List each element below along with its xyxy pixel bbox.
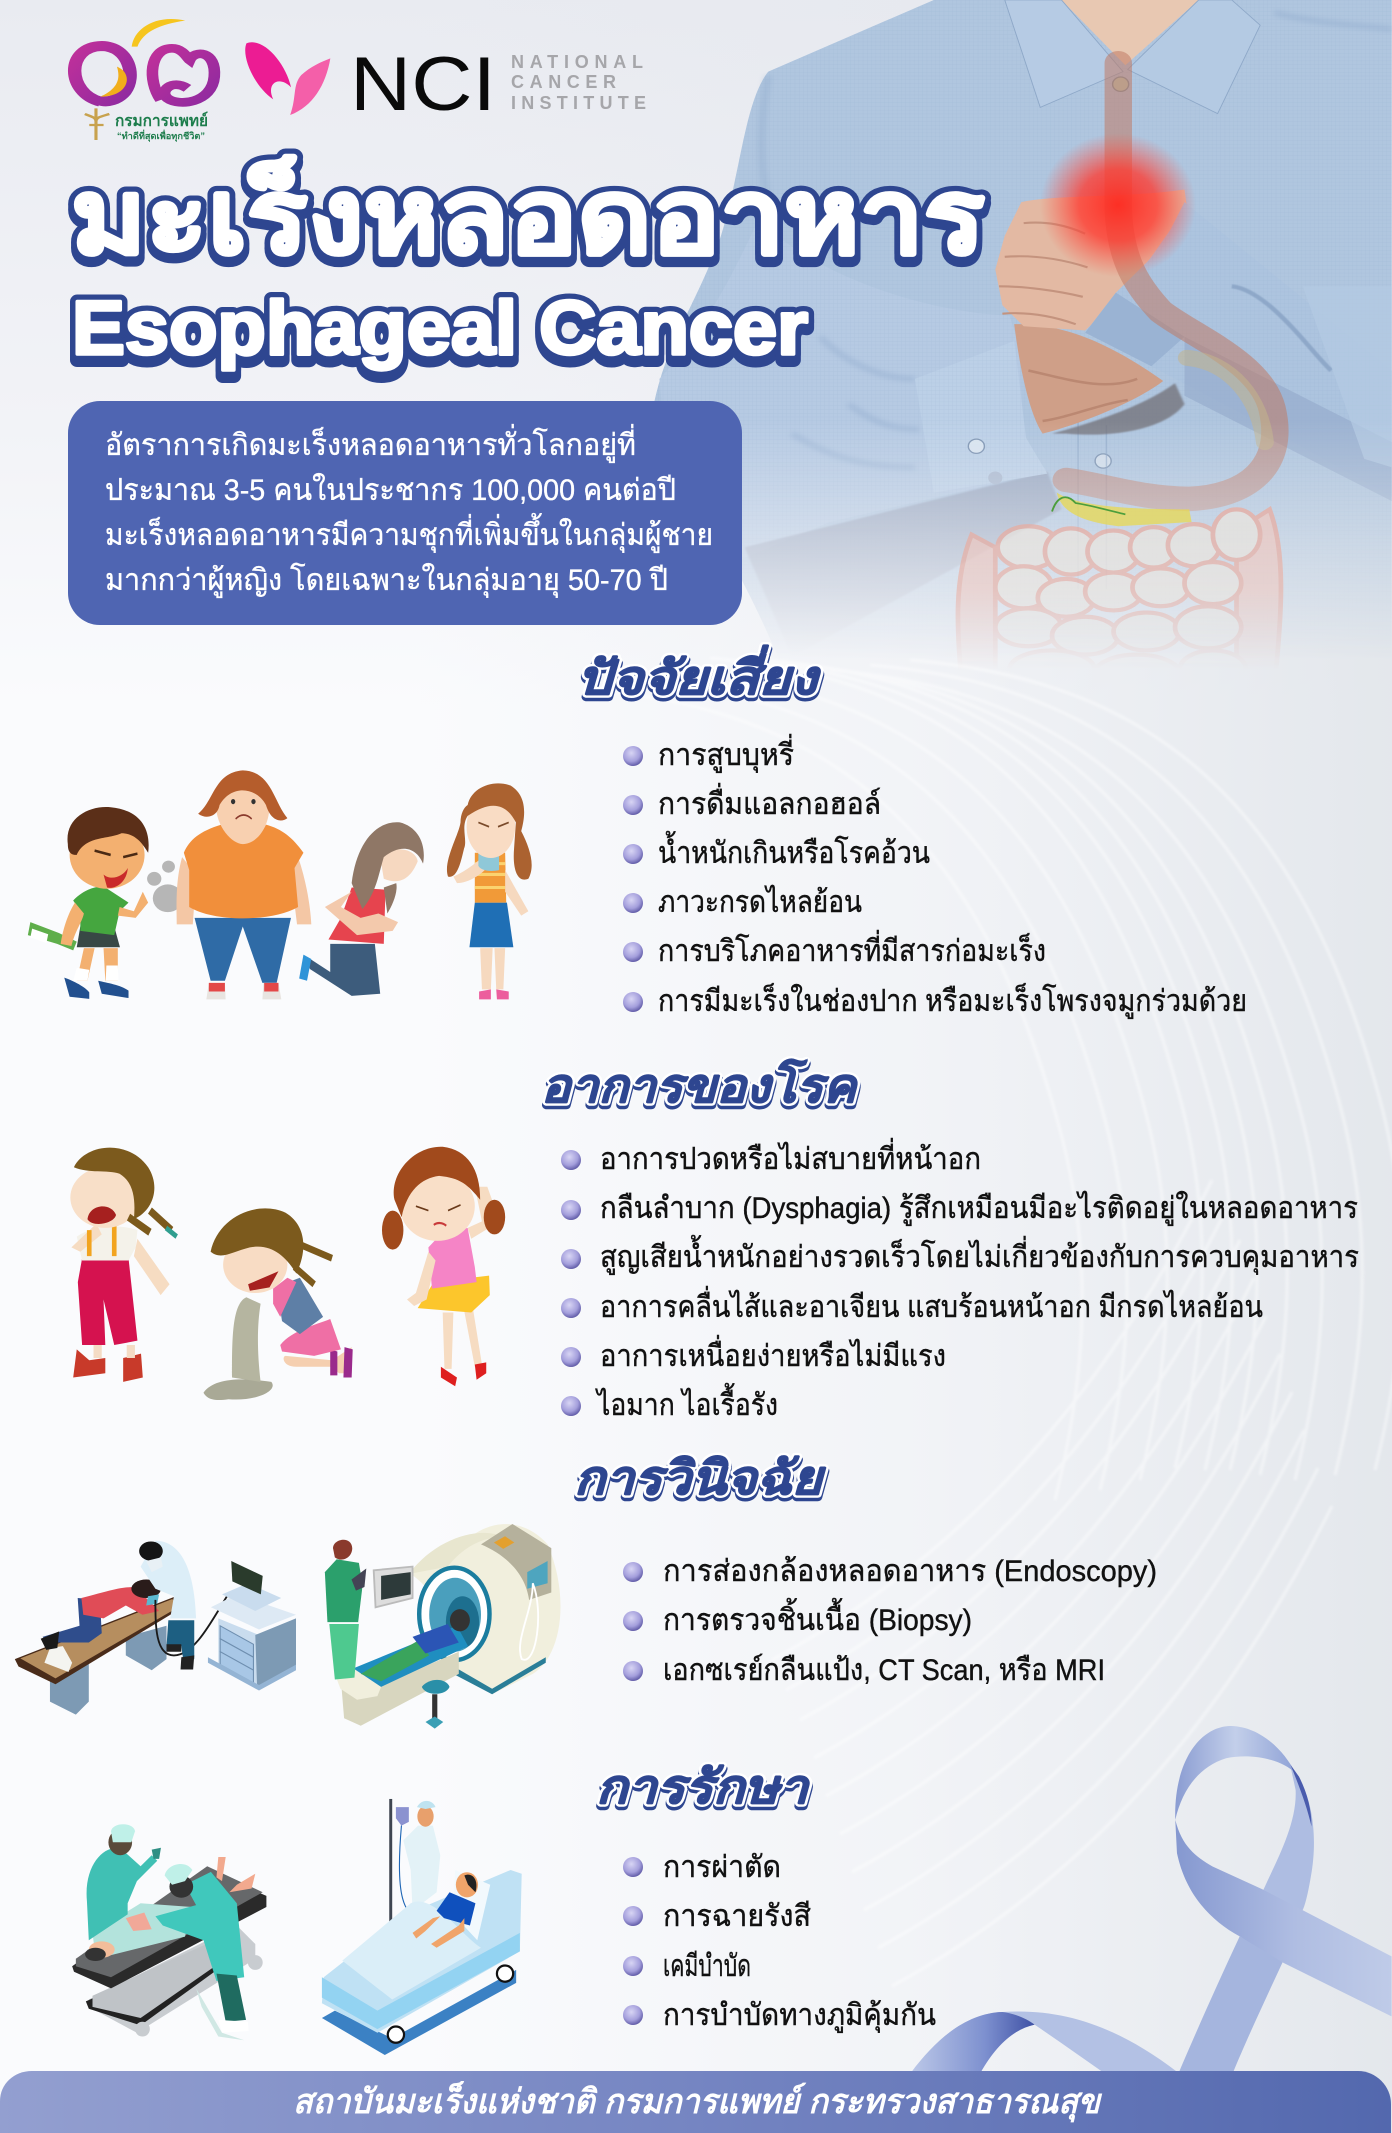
shirt weave <box>658 0 1391 459</box>
intro panel: อัตราการเกิดมะเร็งหลอดอาหารทั่วโลกอยู่ที่ <box>105 424 636 463</box>
elbow shadow <box>746 472 1061 590</box>
dark gap under arms <box>1052 383 1184 435</box>
fist <box>995 189 1187 330</box>
symptoms list: อาการปวดหรือไม่สบายที่หน้าอก <box>600 1138 981 1176</box>
girl with inhaler and orange top <box>447 783 532 999</box>
collar right <box>1128 0 1260 114</box>
buttons <box>968 77 1148 484</box>
heading: risk factors: ปัจจัยเสี่ยง <box>577 647 822 707</box>
heading: diagnosis: การวินิจฉัย <box>574 1454 827 1507</box>
right sleeve and cuff <box>1085 202 1392 497</box>
heading: symptoms: อาการของโรค <box>541 1061 859 1115</box>
treatment list: เคมีบำบัด <box>663 1950 751 1983</box>
illustration: risk factor characters <box>28 770 532 1400</box>
logo text: NCI: NCI <box>350 42 496 127</box>
photo: man clutching chest with esophagus overlay <box>645 0 1392 693</box>
logo text: กรมการแพทย์: “ทำดีที่สุดเพื่อทุกชีวิต” <box>117 129 205 142</box>
stomach and esophagus overlay <box>1066 63 1275 499</box>
subtitle: Esophageal Cancer <box>72 286 808 371</box>
numeral three <box>152 48 214 102</box>
left sleeve <box>660 231 1021 500</box>
endoscopy scene <box>15 1541 296 1715</box>
numeral eight <box>75 46 130 102</box>
footer bar <box>0 2071 1391 2133</box>
obese woman <box>177 770 311 999</box>
footer bar: สถาบันมะเร็งแห่งชาติ กรมการแพทย์ กระทรวงสาธารณสุข <box>293 2081 1103 2123</box>
heading: treatment: การรักษา <box>596 1763 811 1816</box>
logo: Department of Medical Services <box>75 19 214 140</box>
risk factor list: การดื่มแอลกอฮอล์ <box>658 783 881 821</box>
MRI scene <box>325 1524 561 1729</box>
risk factor list <box>623 734 1247 1019</box>
symptoms list <box>561 1138 1359 1422</box>
diagnosis list: การตรวจชิ้นเนื้อ (Biopsy) <box>663 1598 972 1637</box>
heading: treatment: การรักษา <box>596 1760 811 1813</box>
subtitle: Esophageal Cancer <box>72 286 808 371</box>
treatment list: การฉายรังสี <box>663 1900 811 1933</box>
heading: risk factors: ปัจจัยเสี่ยง <box>577 644 822 704</box>
girl coughing in red overalls <box>70 1148 177 1382</box>
forearm <box>1014 324 1163 434</box>
treatment list: การผ่าตัด <box>663 1851 781 1884</box>
diagnosis list: เอกซเรย์กลืนแป้ง, CT Scan, หรือ MRI <box>663 1653 1105 1687</box>
intro panel: มากกว่าผู้หญิง โดยเฉพาะในกลุ่มอายุ 50-70 ปี <box>105 562 668 599</box>
subtitle: Esophageal Cancer <box>72 292 808 377</box>
illustration: medical scenes <box>15 1524 561 2055</box>
infusion bed scene <box>322 1799 522 2055</box>
diagnosis list <box>623 1555 1157 1687</box>
heading: treatment: การรักษา <box>596 1760 811 1813</box>
intro panel <box>68 401 742 625</box>
boy smoking with bottle <box>28 807 183 999</box>
yellow crescent <box>132 19 185 47</box>
risk factor list: การบริโภคอาหารที่มีสารก่อมะเร็ง <box>658 930 1046 968</box>
pancreas <box>1057 493 1192 526</box>
shirt folds <box>762 13 1392 467</box>
ribbon <box>911 1726 1392 2073</box>
logo text: NCI: NATIONAL <box>511 52 643 72</box>
treatment list <box>623 1851 936 2034</box>
intestines <box>956 506 1284 658</box>
kneeling woman holding stomach <box>299 822 424 996</box>
collar left <box>1005 0 1123 107</box>
heading: diagnosis: การวินิจฉัย <box>574 1451 827 1504</box>
risk factor list: ภาวะกรดไหลย้อน <box>658 884 862 919</box>
intro panel: ประมาณ 3-5 คนในประชากร 100,000 คนต่อปี <box>105 473 676 507</box>
neck <box>1062 0 1199 65</box>
girl vomiting <box>203 1208 353 1400</box>
logo text: กรมการแพทย์ <box>115 111 208 142</box>
risk factor list: การสูบบุหรี่ <box>658 734 794 774</box>
symptoms list: อาการคลื่นไส้และอาเจียน แสบร้อนหน้าอก มีกรดไหลย้อน <box>600 1286 1263 1324</box>
caduceus <box>85 108 109 140</box>
sleeve cuff <box>915 341 1047 493</box>
dizzy girl <box>382 1147 505 1386</box>
logo text: NCI <box>350 42 646 127</box>
heading: symptoms: อาการของโรค <box>541 1058 859 1112</box>
risk factor list: น้ำหนักเกินหรือโรคอ้วน <box>658 831 930 870</box>
logo text: NCI: INSTITUTE <box>511 93 646 113</box>
logo text: กรมการแพทย์: กรมการแพทย์ <box>115 111 208 130</box>
heading: symptoms: อาการของโรค <box>541 1058 859 1112</box>
risk factor list: การมีมะเร็งในช่องปาก หรือมะเร็งโพรงจมูกร่วมด้วย <box>658 982 1247 1019</box>
diagnosis list: การส่องกล้องหลอดอาหาร (Endoscopy) <box>663 1555 1157 1588</box>
symptoms list: อาการเหนื่อยง่ายหรือไม่มีแรง <box>600 1335 946 1373</box>
heading: diagnosis: การวินิจฉัย <box>574 1451 827 1504</box>
intro panel: มะเร็งหลอดอาหารมีความชุกที่เพิ่มขึ้นในกลุ่มผู้ชาย <box>105 513 713 554</box>
logo: NCI butterfly <box>245 42 330 115</box>
title: มะเร็งหลอดอาหาร <box>71 154 985 276</box>
gallbladder line <box>1052 497 1125 514</box>
title: มะเร็งหลอดอาหาร <box>71 159 985 281</box>
shirt silhouette <box>645 0 1392 690</box>
heading: risk factors: ปัจจัยเสี่ยง <box>577 644 822 704</box>
treatment list: การบำบัดทางภูมิคุ้มกัน <box>663 1999 936 2034</box>
placket <box>1078 421 1106 589</box>
pain glow <box>1040 133 1196 277</box>
logo text: NCI: CANCER <box>511 72 616 92</box>
surgery scene <box>72 1824 266 2040</box>
symptoms list: ไอมาก ไอเรื้อรัง <box>595 1383 778 1422</box>
title: มะเร็งหลอดอาหาร <box>71 154 985 276</box>
